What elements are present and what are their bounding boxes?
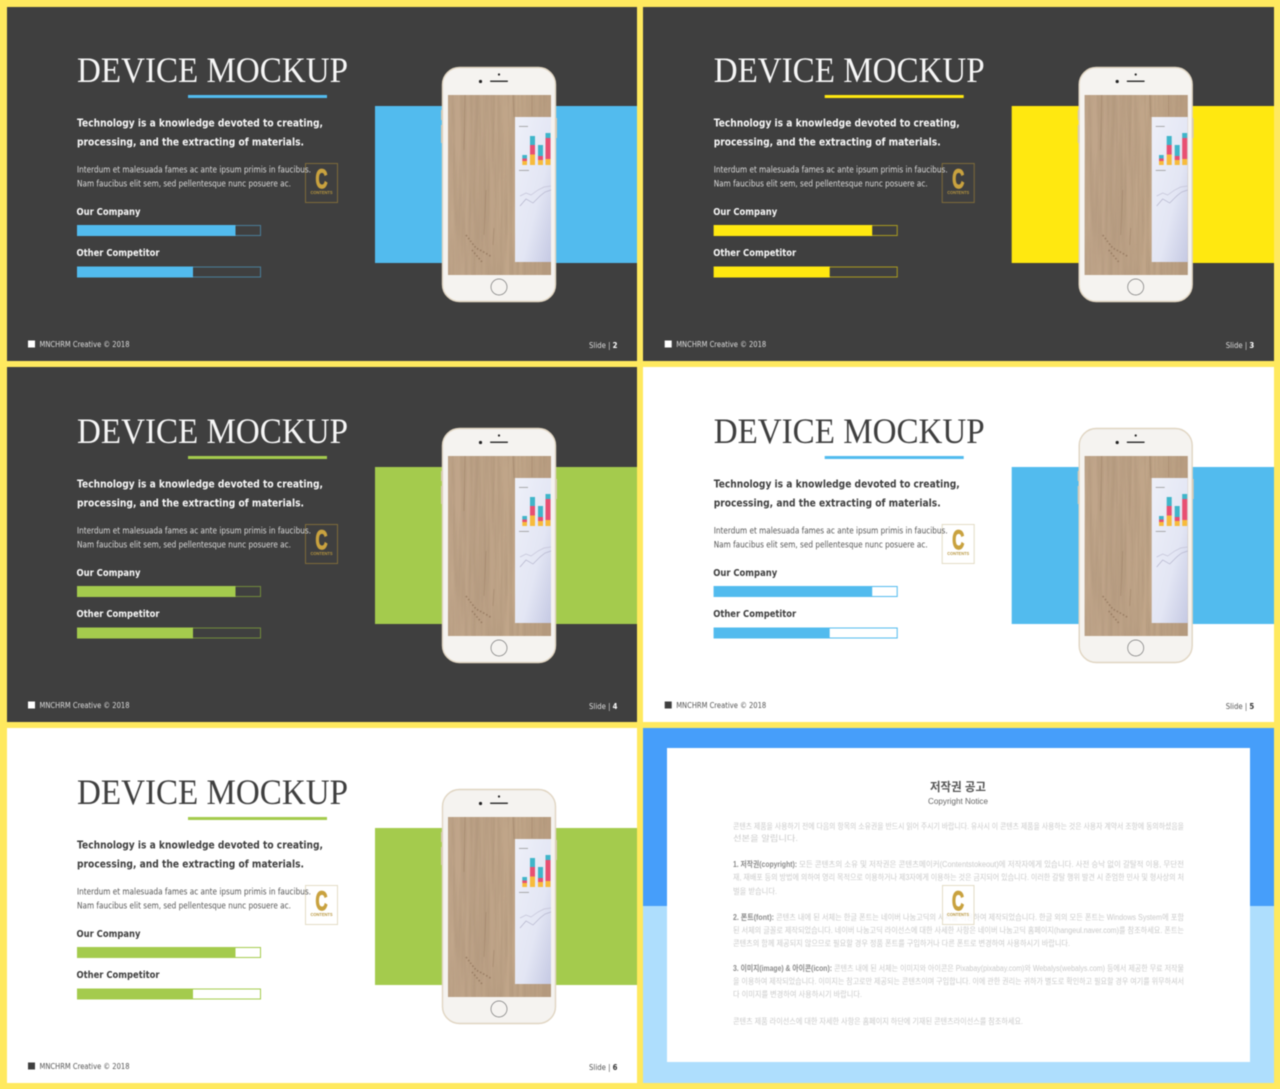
- lead text: processing, and the extracting of materials.: [77, 496, 304, 510]
- bar: other competitor: [713, 609, 897, 638]
- body text: Interdum et malesuada fames ac ante ipsum primis in faucibus.: [77, 166, 311, 176]
- panel: slide 3 dark yellow: [643, 7, 1274, 361]
- logo badge: CONTENTS: [310, 912, 332, 917]
- lead text: [714, 116, 960, 148]
- bar: other competitor: [76, 248, 260, 278]
- logo badge: CONTENTS: [310, 190, 332, 195]
- footer: MNCHRM Creative © 2018: [40, 701, 130, 710]
- bar: our company: [76, 929, 260, 958]
- logo badge: [942, 524, 974, 564]
- title underline: [825, 456, 964, 459]
- logo badge: CONTENTS: [947, 190, 969, 195]
- bar: other competitor: [76, 970, 260, 1000]
- logo badge: [942, 886, 974, 924]
- bar: other competitor: [76, 609, 260, 638]
- logo badge: [306, 524, 338, 564]
- notice closing line: 콘텐츠 제품 라이선스에 대한 자세한 사항은 홈페이지 하단에 기재된 콘텐츠라이선스를 참조하세요.: [733, 1016, 1023, 1026]
- bar: our company: [76, 568, 260, 597]
- logo badge: [306, 886, 338, 924]
- body text: Nam faucibus elit sem, sed pellentesque nunc posuere ac.: [77, 540, 291, 550]
- title underline: [188, 456, 327, 459]
- title: DEVICE MOCKUP: [714, 411, 985, 451]
- bar: our company: Our Company: [76, 207, 141, 218]
- footer: [665, 340, 1254, 350]
- title: DEVICE MOCKUP: [77, 50, 348, 90]
- bar: other competitor: Other Competitor: [713, 609, 796, 620]
- notice card: [667, 748, 1250, 1062]
- bar: other competitor: Other Competitor: [76, 970, 160, 981]
- bar: other competitor: [713, 248, 897, 278]
- title underline: [188, 817, 327, 820]
- notice section 1: 벌을 받습니다.: [733, 886, 777, 896]
- lead text: [77, 478, 323, 510]
- notice section 2: 2. 폰트(font):: [733, 913, 774, 922]
- notice section 3: 을 이용하여 제작되었습니다. 이미지는 참고로만 제공되는 콘텐츠이며 구입합니다. 이에 관한 권리는 귀하가 별도로 확인하고 필요할 경우 여기를 위무하셔서: [733, 976, 1184, 986]
- notice intro: 콘텐츠 제품을 사용하기 전에 다음의 항목의 소유권을 반드시 읽어 주시기 바랍니다. 유사시 이 콘텐츠 제품을 사용하는 것은 사용자 계약서 조항에 동의하셨음을: [733, 821, 1184, 831]
- lead text: Technology is a knowledge devoted to creating,: [77, 478, 323, 490]
- phone mockup: [441, 428, 557, 662]
- logo badge: C: [316, 164, 328, 194]
- body text: [77, 526, 311, 550]
- footer: Slide | 2: [589, 341, 618, 350]
- title: DEVICE MOCKUP: [77, 772, 348, 812]
- notice section 1: 1. 저작권(copyright):: [733, 859, 797, 869]
- footer: MNCHRM Creative © 2018: [40, 1062, 130, 1071]
- body text: Nam faucibus elit sem, sed pellentesque nunc posuere ac.: [714, 540, 928, 550]
- footer: [28, 340, 618, 350]
- notice section 2: [733, 912, 1185, 948]
- notice intro: [733, 821, 1184, 843]
- body text: [77, 166, 311, 190]
- body text: Interdum et malesuada fames ac ante ipsum primis in faucibus.: [77, 526, 311, 536]
- phone mockup: [1078, 428, 1194, 662]
- phone mockup: [441, 790, 557, 1024]
- yellow band: [1012, 106, 1274, 263]
- notice section 1: 재, 재배포 등의 방법에 의하여 영리 목적으로 이용하거나 제3자에게 이용하는 것은 금지되어 있습니다. 이러한 갈탈 행위 발견 시 준엄한 민사 및 형사상의 처: [733, 872, 1184, 882]
- bar: our company: [713, 207, 897, 236]
- bar: other competitor: Other Competitor: [713, 248, 796, 259]
- footer: MNCHRM Creative © 2018: [676, 701, 766, 710]
- footer: MNCHRM Creative © 2018: [676, 340, 766, 349]
- lead text: [714, 478, 960, 510]
- bar: our company: Our Company: [76, 929, 141, 940]
- logo badge: [306, 164, 338, 202]
- notice subheading: Copyright Notice: [928, 796, 988, 806]
- green band: [375, 828, 637, 985]
- notice section 1: 모든 콘텐츠의 소유 및 저작권은 콘텐츠메이커(Contentstokeout)에 저작자에게 있습니다. 사전 승낙 없이 갈탈적 이용, 무단전: [799, 859, 1184, 869]
- title underline: [825, 95, 964, 98]
- bar: our company: [76, 207, 260, 236]
- body text: Nam faucibus elit sem, sed pellentesque nunc posuere ac.: [77, 180, 291, 190]
- phone mockup: [1078, 68, 1194, 302]
- notice section 2: 콘텐츠의 함께 제공되지 않으므로 필요할 경우 정품 폰트를 구입하거나 다른 폰트로 변경하여 사용하시기 바랍니다.: [733, 938, 1070, 948]
- logo badge: CONTENTS: [947, 551, 969, 556]
- title underline: [188, 95, 327, 98]
- body text: Interdum et malesuada fames ac ante ipsum primis in faucibus.: [77, 888, 311, 898]
- logo badge: CONTENTS: [947, 912, 969, 917]
- lead text: processing, and the extracting of materials.: [77, 858, 304, 870]
- phone mockup: [441, 68, 557, 302]
- footer: [28, 1062, 618, 1072]
- body text: Interdum et malesuada fames ac ante ipsum primis in faucibus.: [714, 526, 948, 536]
- notice intro: 선본을 알립니다.: [733, 833, 798, 843]
- logo badge: CONTENTS: [310, 551, 332, 556]
- footer: [665, 701, 1254, 711]
- panel: slide 5 white blue: [643, 367, 1274, 722]
- panel: slide 6 white green: [7, 728, 637, 1083]
- lead text: Technology is a knowledge devoted to creating,: [77, 116, 323, 130]
- footer: Slide | 5: [1226, 702, 1254, 711]
- notice section 3: 다 이미지를 변경하여 사용하시기 바랍니다.: [733, 989, 862, 999]
- lead text: processing, and the extracting of materials.: [77, 136, 304, 148]
- notice section 3: 3. 이미지(image) & 아이콘(icon):: [733, 963, 832, 973]
- body text: Interdum et malesuada fames ac ante ipsum primis in faucibus.: [714, 166, 948, 176]
- logo badge: [942, 164, 974, 202]
- panel: copyright notice: [643, 728, 1274, 1083]
- green band: [375, 467, 637, 624]
- panel: slide 2 dark blue: [7, 7, 637, 361]
- bar: our company: [713, 568, 897, 597]
- title: DEVICE MOCKUP: [714, 50, 985, 90]
- lead text: [77, 838, 323, 870]
- body text: Nam faucibus elit sem, sed pellentesque nunc posuere ac.: [77, 902, 291, 912]
- notice section 3: [733, 963, 1184, 999]
- footer: MNCHRM Creative © 2018: [40, 340, 130, 349]
- notice section 2: 된 서체의 글꼴로 제작되었습니다. 네이버 나눔고딕 라이선스에 대한 사세한 사항은 네이버 나눔고딕 홈페이지(hangeul.naver.com)를 참조하세요. 폰트는: [733, 925, 1184, 935]
- footer: Slide | 3: [1226, 341, 1254, 350]
- bar: our company: Our Company: [713, 568, 778, 579]
- lead text: processing, and the extracting of materials.: [714, 136, 941, 148]
- logo badge: C: [952, 525, 964, 555]
- bar: our company: Our Company: [76, 568, 141, 579]
- body text: [714, 526, 948, 550]
- body text: [77, 888, 311, 912]
- notice heading: 저작권 공고: [930, 779, 986, 794]
- bar: our company: Our Company: [713, 207, 778, 218]
- notice section 1: [733, 859, 1184, 896]
- footer: Slide | 4: [589, 702, 618, 711]
- logo badge: C: [952, 164, 964, 194]
- lead text: processing, and the extracting of materials.: [714, 496, 941, 510]
- notice section 3: 콘텐츠 내에 된 서체는 이미지와 아이콘은 Pixabay(pixabay.com)와 Webalys(webalys.com) 등에서 제공한 무료 저작물: [834, 963, 1184, 973]
- body text: Nam faucibus elit sem, sed pellentesque nunc posuere ac.: [714, 180, 928, 190]
- footer: [28, 701, 618, 711]
- lead text: [77, 116, 323, 148]
- blue band: [375, 106, 637, 263]
- logo badge: C: [316, 886, 328, 916]
- logo badge: C: [316, 525, 328, 555]
- lead text: Technology is a knowledge devoted to creating,: [77, 838, 323, 852]
- body text: [714, 166, 948, 190]
- footer: Slide | 6: [589, 1063, 618, 1072]
- logo badge: C: [952, 886, 964, 916]
- title: DEVICE MOCKUP: [77, 411, 348, 451]
- bar: other competitor: Other Competitor: [76, 248, 160, 259]
- lead text: Technology is a knowledge devoted to creating,: [714, 116, 960, 130]
- notice section 2: 콘텐츠 내에 된 서체는 한글 폰트는 네이버 나눔고딕의 서체를 이용하여 제작되었습니다. 한글 외의 모든 폰트는 Windows System에 포함: [776, 912, 1185, 922]
- lead text: Technology is a knowledge devoted to creating,: [714, 478, 960, 490]
- blue band: [1012, 467, 1274, 624]
- bar: other competitor: Other Competitor: [76, 609, 160, 620]
- panel: slide 4 dark green: [7, 367, 637, 722]
